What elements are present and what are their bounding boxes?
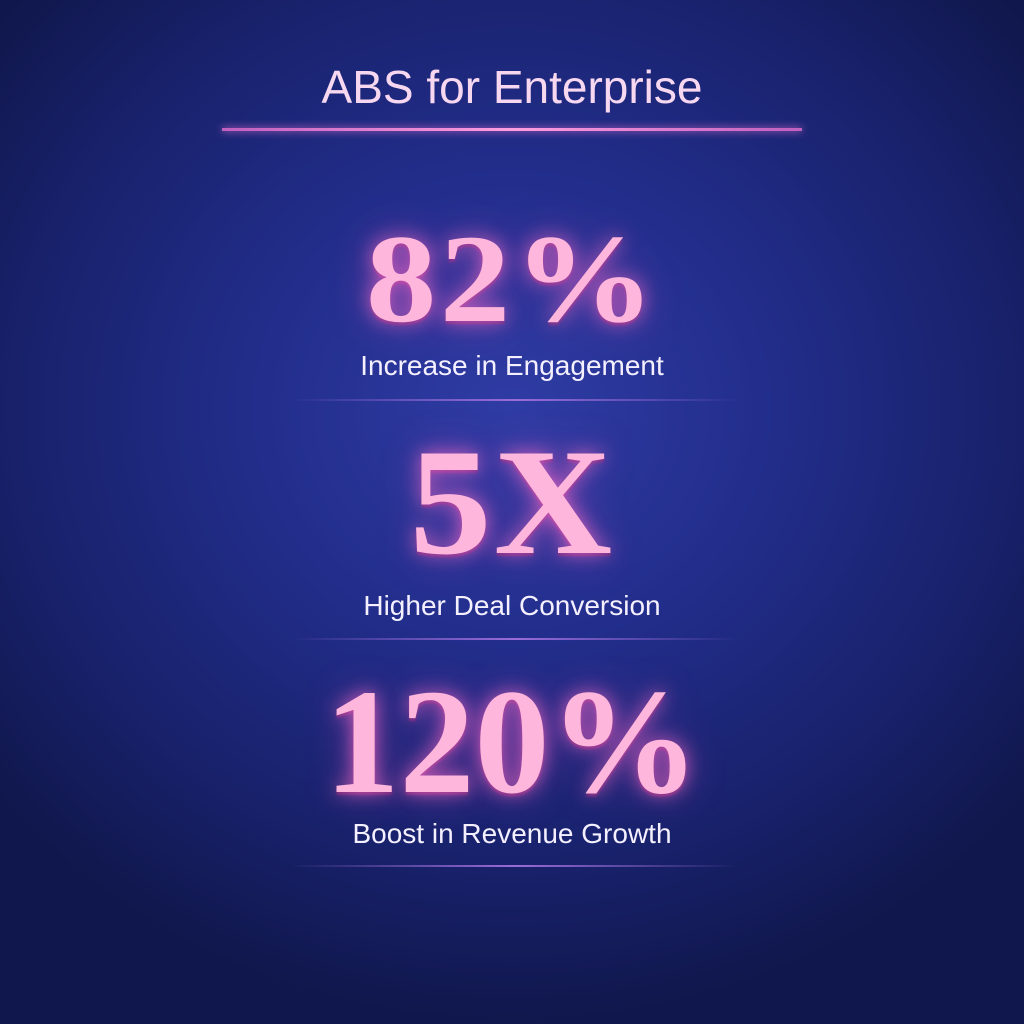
title: ABS for Enterprise bbox=[322, 61, 702, 113]
label: revenue: Boost in Revenue Growth bbox=[352, 818, 672, 849]
stat: 5X: 5X bbox=[410, 418, 614, 586]
title underline bbox=[222, 128, 802, 131]
stat: 120%: 120% bbox=[324, 659, 700, 825]
label: conversion: Higher Deal Conversion bbox=[363, 590, 661, 621]
label: engagement: Increase in Engagement bbox=[360, 350, 664, 381]
stat: 82%: 82% bbox=[366, 210, 658, 349]
